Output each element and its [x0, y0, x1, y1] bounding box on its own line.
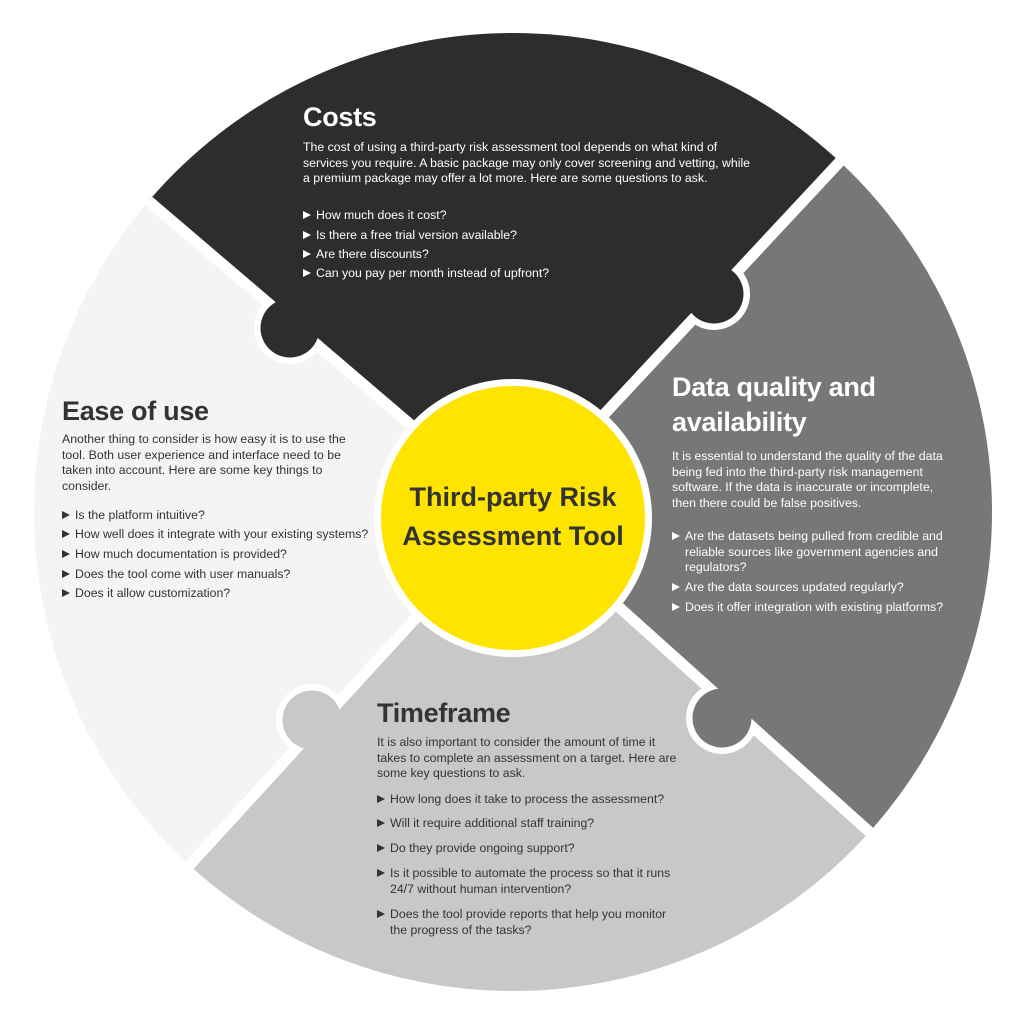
center title: Assessment Tool: [402, 521, 624, 551]
knob: costs into ease: [254, 296, 324, 364]
bullets: timeframe: Will it require additional staff training?: [390, 816, 594, 830]
text: ease of use: Another thing to consider is how easy it is to use the tool. Both user experience and interface need to be taken into account. Here are some key things to consider.: [62, 432, 346, 492]
text: costs: The cost of using a third-party risk assessment tool depends on what kind of services you require. A basic package may only cover screening and vetting, while a premium package may offer a lot more. Here are some questions to ask.: [303, 140, 750, 185]
bullets: timeframe: [377, 792, 670, 936]
bullets: timeframe: Do they provide ongoing support?: [390, 841, 575, 855]
bullets: costs: [303, 208, 549, 280]
text: timeframe: It is also important to consider the amount of time it takes to complete an assessment on a target. Here are some key questions to ask.: [377, 735, 676, 780]
bullets: data quality: Does it offer integration with existing platforms?: [685, 600, 943, 614]
quadrant: data quality: [608, 162, 992, 832]
knob: costs into data: [686, 264, 750, 330]
heading: data quality: availability: [672, 407, 806, 437]
bullets: ease of use: Does it allow customization?: [75, 586, 230, 600]
bullets: data quality: [672, 529, 943, 614]
heading: timeframe: Timeframe: [377, 698, 510, 728]
heading: data quality: Data quality and: [672, 372, 876, 402]
knob: timeframe into ease: [276, 684, 346, 755]
bullets: ease of use: How much documentation is provided?: [75, 547, 287, 561]
bullets: timeframe: How long does it take to process the assessment?: [390, 792, 664, 806]
heading: ease of use: Ease of use: [62, 396, 209, 426]
center title: Third-party Risk: [409, 482, 617, 512]
bullets: ease of use: [62, 508, 368, 600]
bullets: costs: How much does it cost?: [316, 208, 447, 222]
quadrant: costs: [148, 33, 840, 420]
panel: ease of use: [62, 396, 368, 600]
knob: data into timeframe: [686, 682, 759, 754]
quadrant: ease of use: [34, 206, 412, 861]
bullets: data quality: Are the datasets being pulled from credible and reliable sources like government agencies and regulators?: [685, 529, 943, 574]
bullets: data quality: Are the data sources updated regularly?: [685, 580, 904, 594]
bullets: timeframe: Is it possible to automate the process so that it runs 24/7 without human intervention?: [390, 866, 670, 896]
panel: costs: [303, 102, 750, 280]
bullets: ease of use: Is the platform intuitive?: [75, 508, 205, 522]
bullets: ease of use: How well does it integrate with your existing systems?: [75, 527, 368, 541]
bullets: ease of use: Does the tool come with user manuals?: [75, 567, 290, 581]
panel: data quality: [672, 372, 943, 614]
heading: costs: Costs: [303, 102, 377, 132]
bullets: timeframe: Does the tool provide reports that help you monitor the progress of the tasks?: [390, 907, 666, 936]
heading: data quality: [672, 372, 876, 437]
bullets: costs: Are there discounts?: [316, 247, 429, 261]
panel: timeframe: [377, 698, 676, 936]
center title: [402, 482, 624, 551]
text: data quality: It is essential to understand the quality of the data being fed into the third-party risk management software. If the data is inaccurate or incomplete, then there could be false positives.: [672, 449, 943, 510]
quadrant: timeframe: [191, 612, 870, 991]
bullets: costs: Can you pay per month instead of upfront?: [316, 266, 549, 280]
bullets: costs: Is there a free trial version available?: [316, 228, 517, 242]
center circle: [374, 379, 652, 657]
